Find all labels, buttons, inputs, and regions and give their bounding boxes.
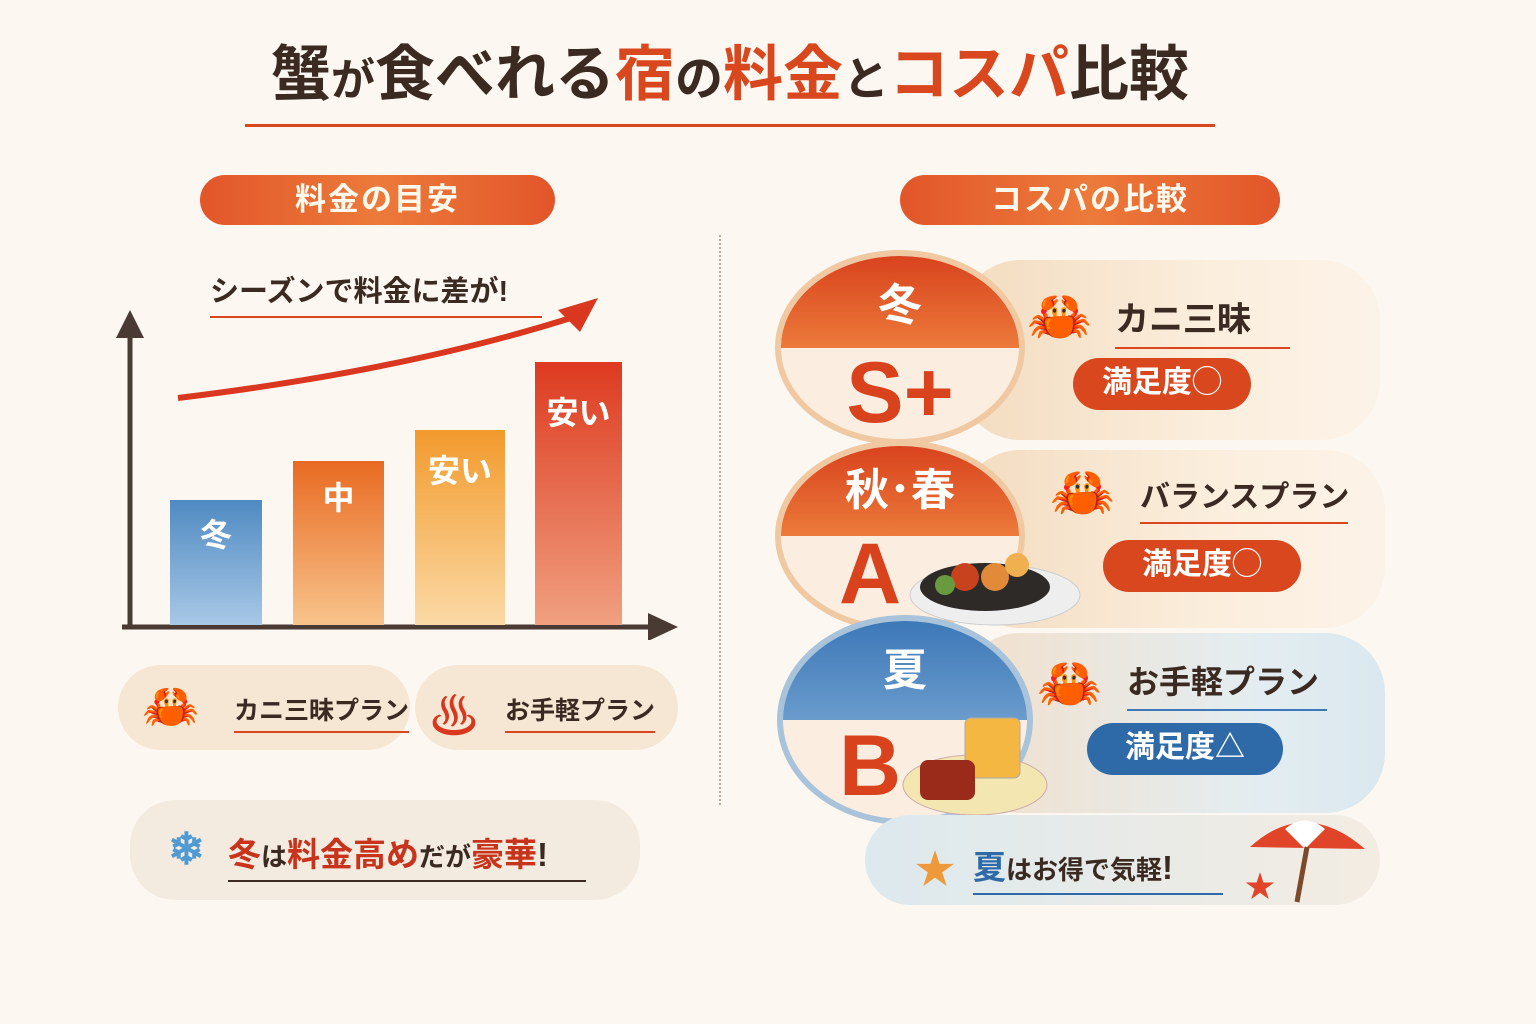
legend: お手軽プラン: お手軽プラン bbox=[505, 697, 655, 725]
chart caption bbox=[210, 268, 542, 318]
bar: 安い bbox=[415, 430, 505, 625]
rating bbox=[1087, 723, 1283, 775]
badge: 夏 B: B bbox=[839, 718, 901, 814]
badge: 夏 B: 夏 bbox=[883, 646, 927, 695]
rating: 満足度◯ bbox=[1102, 366, 1222, 399]
legend: カニ三昧プラン: カニ三昧プラン bbox=[234, 697, 409, 725]
rating: 満足度△ bbox=[1125, 731, 1245, 764]
legend: お手軽プラン bbox=[415, 665, 678, 750]
badge: 秋春 A: A bbox=[839, 526, 901, 622]
icon: crab: 🦀 bbox=[142, 680, 199, 732]
row: 冬 S+ bbox=[775, 250, 1380, 442]
icon: beach umbrella: ★ bbox=[1245, 871, 1275, 904]
legend: カニ三昧プラン bbox=[118, 665, 410, 750]
bar: 中 bbox=[293, 461, 384, 625]
row: 秋・春 A bbox=[775, 442, 1385, 628]
badge: 夏 B bbox=[777, 615, 1033, 825]
badge: 秋春 A bbox=[775, 440, 1025, 632]
rating bbox=[1073, 358, 1251, 410]
icon: crab: 🦀 bbox=[1027, 288, 1092, 346]
badge: 冬 S+ bbox=[775, 250, 1025, 445]
bar: 中: 中 bbox=[322, 480, 354, 516]
row: 夏 B bbox=[777, 615, 1385, 824]
row: 秋・春 A: バランスプラン bbox=[1140, 481, 1349, 514]
icon: snowflake: ❄ bbox=[168, 825, 205, 874]
icon: drink and meat bbox=[902, 718, 1048, 815]
bar: 安い high: 安い bbox=[546, 395, 610, 431]
chart: seasonal price bbox=[116, 276, 678, 640]
callout: summer bbox=[865, 815, 1380, 905]
badge: 冬 S+: 冬 bbox=[878, 281, 922, 330]
icon: starfish: ★ bbox=[915, 848, 955, 892]
chart caption: シーズンで料金に差が! bbox=[210, 276, 508, 308]
icon: crab: 🦀 bbox=[1037, 655, 1102, 713]
row: 冬 S+: カニ三昧 bbox=[1115, 301, 1251, 339]
rating: 満足度◯ bbox=[1142, 548, 1262, 581]
icon: tempura dish bbox=[910, 553, 1080, 626]
rating bbox=[1103, 540, 1301, 592]
bar: 冬 bbox=[170, 500, 262, 625]
bar: 冬: 冬 bbox=[200, 517, 232, 553]
title bbox=[245, 35, 1215, 127]
icon: onsen: ♨ bbox=[429, 689, 479, 745]
badge: 秋春 A: 秋･春 bbox=[845, 466, 955, 515]
heading: 料金の目安: 料金の目安 bbox=[295, 182, 460, 217]
callout: winter bbox=[130, 800, 640, 900]
bar: 安い high bbox=[535, 362, 622, 625]
row: 夏 B: お手軽プラン bbox=[1127, 664, 1319, 700]
divider bbox=[719, 235, 721, 805]
heading: コスパの比較 bbox=[900, 175, 1280, 225]
callout: summer: 夏はお得で気軽! bbox=[973, 849, 1173, 886]
heading: 料金の目安 bbox=[200, 175, 555, 225]
icon: beach umbrella bbox=[1245, 820, 1365, 904]
badge: 冬 S+: S+ bbox=[846, 345, 954, 441]
bar: 安い: 安い bbox=[428, 453, 492, 489]
arrow: rising trend bbox=[116, 298, 678, 640]
icon: crab: 🦀 bbox=[1050, 464, 1115, 522]
heading: コスパの比較: コスパの比較 bbox=[991, 182, 1189, 217]
title: 蟹が食べれる宿の料金とコスパ比較 bbox=[271, 41, 1189, 108]
callout: winter: 冬は料金高めだが豪華! bbox=[228, 836, 548, 873]
